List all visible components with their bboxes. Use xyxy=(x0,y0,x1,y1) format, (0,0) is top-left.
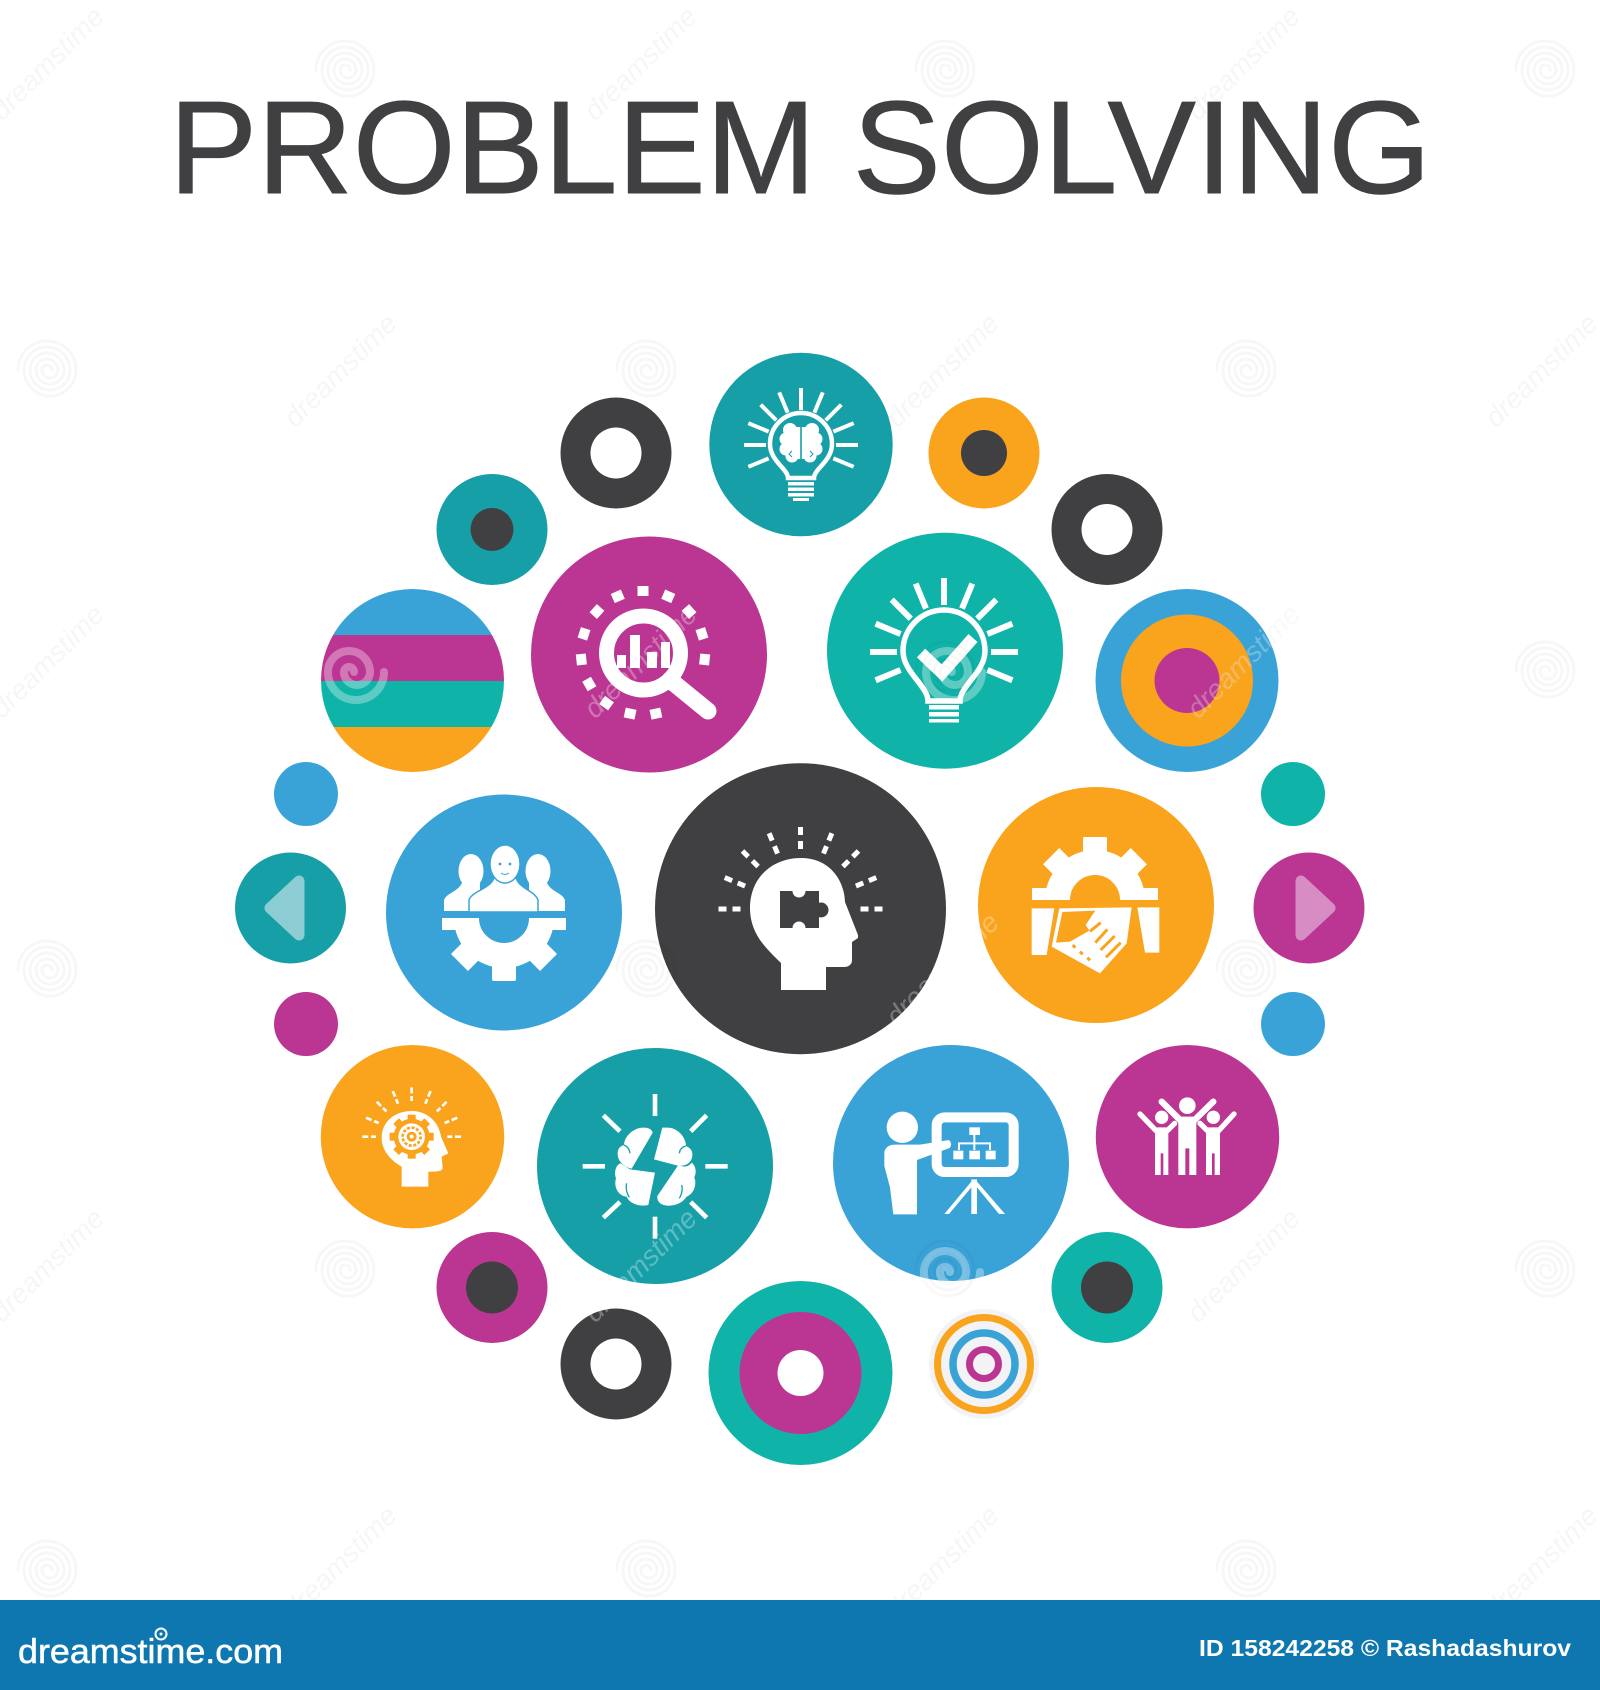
icon: three people raising arms xyxy=(1140,1097,1234,1175)
icon: bulb with brain xyxy=(744,388,858,501)
icon: handshake xyxy=(1032,907,1159,973)
dot: upper-left teal xyxy=(436,474,548,585)
target icon xyxy=(929,1309,1039,1419)
brand logo: dreamstime.com xyxy=(18,1633,283,1671)
watermark spirals and labels: dreamstime xyxy=(1181,599,1306,724)
icon: bulb with check mark xyxy=(870,578,1018,722)
icon: brain with lightning xyxy=(583,1094,728,1239)
panel: solution bulb with check xyxy=(827,533,1063,769)
watermark spirals and labels: dreamstime xyxy=(578,1203,703,1328)
ring of small circles xyxy=(235,398,1364,1465)
dot: lower-right teal xyxy=(1052,1232,1162,1343)
dot: left magenta xyxy=(274,992,338,1056)
watermark spirals and labels: dreamstime xyxy=(1181,1,1306,126)
watermark spirals and labels: dreamstime xyxy=(578,599,703,724)
striped circle xyxy=(320,588,505,773)
half gear xyxy=(442,918,566,981)
panel: presentation xyxy=(833,1045,1069,1281)
icon: presenter and board xyxy=(884,1112,1014,1214)
dot: right blue xyxy=(1261,992,1325,1056)
panel: team cheering xyxy=(1096,1045,1279,1228)
icon: head with gear xyxy=(362,1087,461,1187)
panel: data analysis magnifier xyxy=(531,536,767,772)
dot: bottom dark ring xyxy=(560,1308,672,1420)
watermark spirals and labels: dreamstime xyxy=(278,308,403,433)
icon: dashed rays xyxy=(718,827,882,909)
watermark spirals and labels: dreamstime xyxy=(880,308,1005,433)
icon: magnifier with chart xyxy=(576,586,710,720)
watermark spirals and labels: dreamstime xyxy=(578,1,703,126)
watermark spirals and labels: dreamstime xyxy=(880,1500,1005,1625)
watermark spirals and labels: dreamstime xyxy=(1181,599,1306,724)
bottom concentric circle xyxy=(708,1281,892,1465)
dot: upper-right dark ring xyxy=(1052,474,1162,585)
icon: half gear xyxy=(1032,837,1158,900)
dot: lower-left magenta xyxy=(436,1232,548,1343)
arrow: left button xyxy=(235,852,346,964)
dot: top-left dark ring xyxy=(560,398,672,508)
dot: right teal xyxy=(1261,762,1325,826)
title: PROBLEM SOLVING xyxy=(169,74,1431,221)
dot: left blue xyxy=(274,762,338,826)
watermark spirals and labels: dreamstime xyxy=(278,1500,403,1625)
panel: brainstorm lightning xyxy=(537,1048,773,1284)
icon: head with puzzle piece xyxy=(750,858,858,990)
panel: orange mind gear xyxy=(321,1045,504,1228)
arrow: right button xyxy=(1254,852,1364,964)
panel: central head xyxy=(655,763,946,1054)
icon: people above half gear xyxy=(442,845,566,981)
concentric circle right xyxy=(1096,589,1278,772)
panel: brain idea bulb xyxy=(709,353,893,536)
watermark spirals and labels: dreamstime xyxy=(1181,1203,1306,1328)
dot: top-right orange xyxy=(928,398,1040,508)
panel: team gear xyxy=(386,794,622,1030)
panel: partnership handshake gear xyxy=(978,787,1214,1023)
watermark spirals and labels: dreamstime xyxy=(880,907,1005,1032)
image ID and credit: ID 158242258 © Rashadashurov xyxy=(1199,1635,1571,1661)
people xyxy=(444,845,565,912)
footer banner xyxy=(0,1600,1600,1690)
